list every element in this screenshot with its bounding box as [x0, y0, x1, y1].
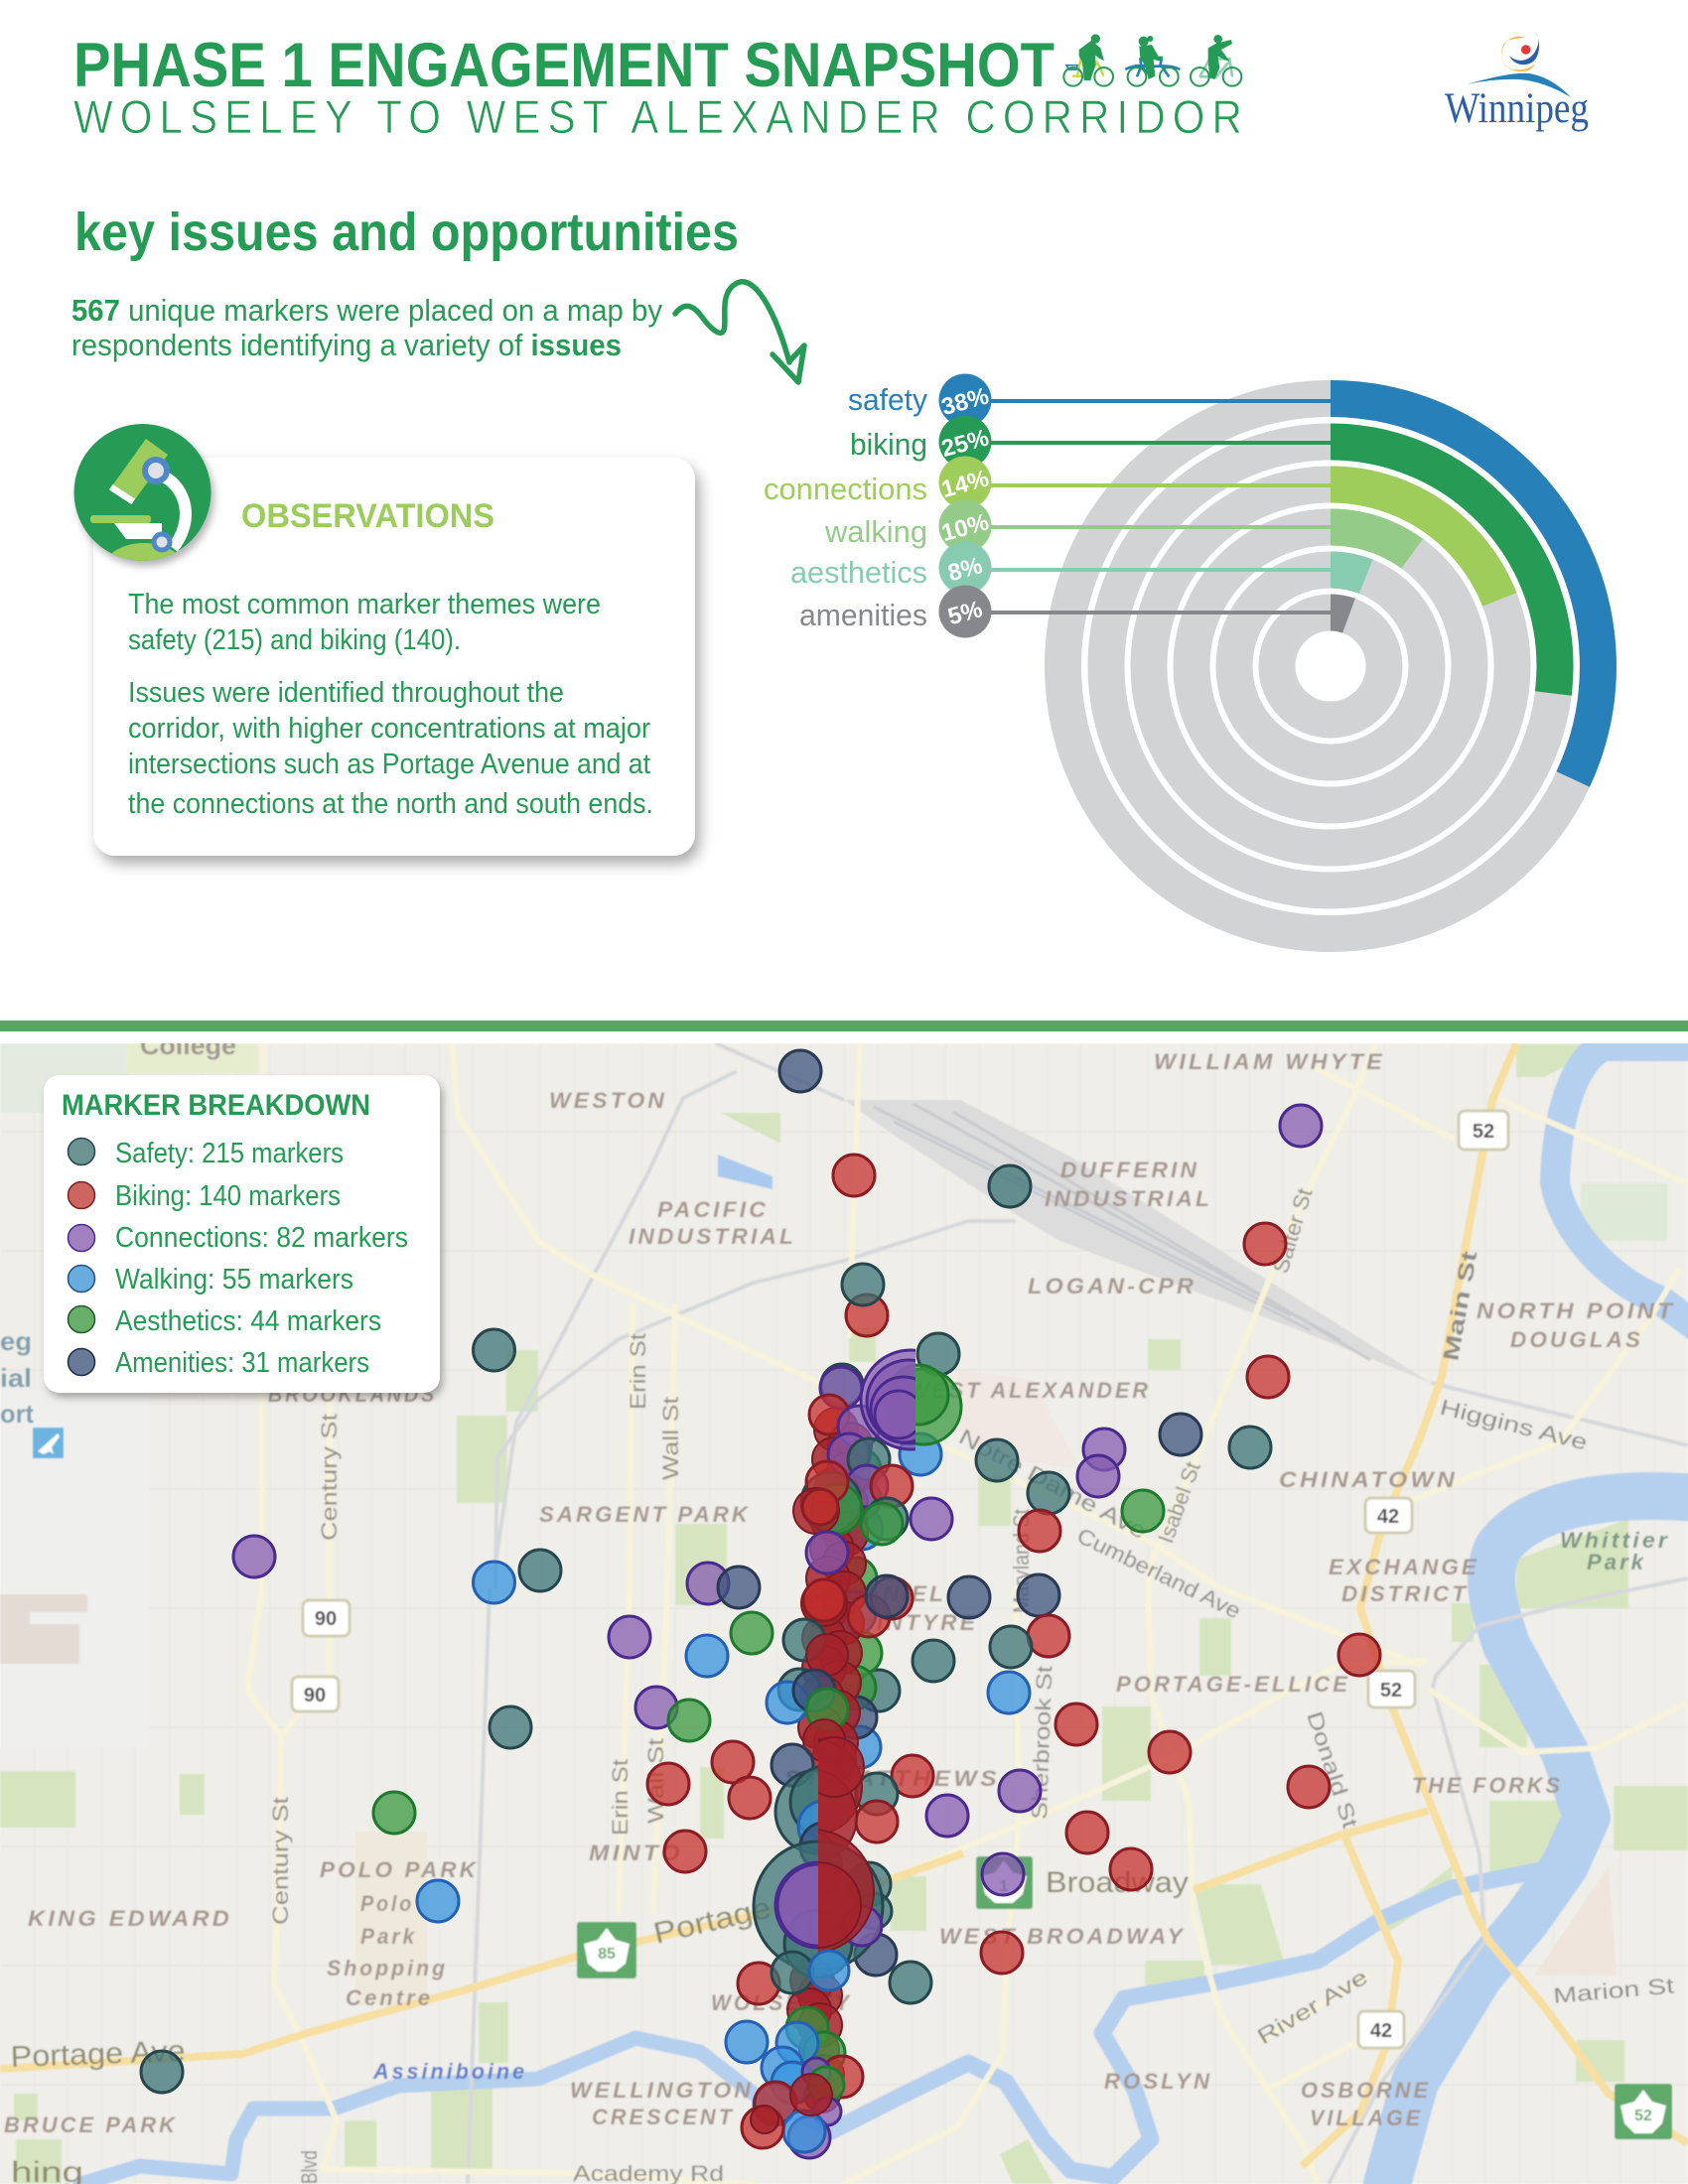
neighbourhood and street labels: WEST BROADWAY	[939, 1924, 1186, 1949]
neighbourhood and street labels: Century St	[317, 1414, 342, 1541]
card body text: Issues were identified throughout the	[128, 677, 564, 709]
legend item: biking: Biking: 140 markers	[115, 1180, 341, 1212]
neighbourhood and street labels: ROSLYN	[1104, 2069, 1212, 2094]
neighbourhood and street labels: Sherbrook St	[1027, 1665, 1056, 1820]
markers: individual locations	[141, 1050, 1380, 2093]
card body text: The most common marker themes were	[128, 589, 601, 620]
neighbourhood and street labels: Notre Dame Ave	[955, 1424, 1151, 1544]
label: aesthetics	[790, 542, 991, 594]
legend item: safety: Safety: 215 markers	[115, 1138, 344, 1169]
neighbourhood and street labels: DANIEL	[844, 1581, 946, 1606]
neighbourhood and street labels: OSBORNE	[1301, 2078, 1431, 2103]
neighbourhood and street labels: Erin St	[608, 1759, 633, 1836]
intro text: respondents identifying a variety of issues	[71, 328, 622, 362]
neighbourhood and street labels: Centre	[346, 1985, 433, 2010]
neighbourhood and street labels: Maryland St	[1009, 1509, 1034, 1613]
label: connections: connections	[764, 472, 927, 506]
arc: biking	[1331, 442, 1555, 693]
label: connections	[764, 457, 992, 508]
neighbourhood and street labels: Blvd	[297, 2150, 322, 2184]
neighbourhood and street labels: Higgins Ave	[1438, 1395, 1590, 1455]
neighbourhood and street labels: Polo	[360, 1891, 414, 1916]
neighbourhood and street labels: EXCHANGE	[1329, 1555, 1479, 1579]
neighbourhood and street labels: Marion St	[1552, 1973, 1675, 2008]
title: PHASE 1 ENGAGEMENT SNAPSHOT	[73, 31, 1055, 100]
neighbourhood and street labels: Park	[360, 1924, 417, 1949]
legend item: connections: Connections: 82 markers	[115, 1222, 408, 1254]
arrow: squiggle to chart	[675, 282, 804, 382]
neighbourhood and street labels: NORTH POINT	[1477, 1298, 1675, 1323]
neighbourhood and street labels: Whittier	[1560, 1528, 1670, 1553]
map: corridor base map with markers	[0, 1030, 1688, 2184]
neighbourhood and street labels: ort	[0, 1399, 34, 1429]
icon: microscope	[72, 424, 218, 570]
arc: safety	[1331, 399, 1598, 779]
neighbourhood and street labels: eg	[0, 1326, 32, 1356]
rail yard	[844, 1100, 1431, 1383]
neighbourhood and street labels: Broadway	[1046, 1866, 1189, 1899]
route leaf shields: 1	[1000, 1878, 1009, 1895]
highway shields: 42	[1370, 2020, 1392, 2042]
label: connections: 14%	[938, 465, 992, 503]
neighbourhood and street labels: Portage Ave	[10, 2035, 186, 2074]
neighbourhood and street labels: Assiniboine	[372, 2059, 527, 2084]
neighbourhood and street labels: ial	[0, 1363, 32, 1393]
label: walking: walking	[824, 514, 927, 549]
neighbourhood and street labels: Isabel St	[1153, 1458, 1205, 1547]
main Portage cluster	[751, 1830, 892, 1993]
neighbourhood and street labels: DUFFERIN	[1060, 1158, 1199, 1182]
neighbourhood and street labels: Wall St	[658, 1397, 683, 1480]
roads	[247, 1043, 1688, 2184]
neighbourhood and street labels: Shopping	[327, 1956, 448, 1980]
neighbourhood and street labels: WESTON	[549, 1088, 667, 1113]
neighbourhood and street labels: Salter St	[1268, 1185, 1318, 1276]
neighbourhood and street labels: Main St	[1438, 1248, 1482, 1363]
neighbourhood and street labels: BROOKLANDS	[268, 1382, 437, 1407]
label: biking: 25%	[938, 424, 992, 463]
subtitle: WOLSELEY TO WEST ALEXANDER CORRIDOR	[73, 90, 1249, 143]
markers: corridor cluster	[742, 1333, 961, 2158]
chart tracks	[1062, 399, 1599, 933]
arc: aesthetics	[1331, 570, 1366, 577]
label: amenities: 5%	[945, 596, 985, 630]
neighbourhood and street labels: ST MATTHEWS	[784, 1766, 1000, 1791]
legend item: walking: Walking: 55 markers	[115, 1264, 353, 1296]
north cluster	[783, 1333, 961, 1676]
label: aesthetics: aesthetics	[790, 555, 927, 590]
label: walking	[824, 500, 992, 552]
mid cluster	[765, 1668, 900, 1862]
neighbourhood and street labels: WILLIAM WHYTE	[1154, 1049, 1385, 1074]
neighbourhood and street labels: INDUSTRIAL	[1045, 1186, 1212, 1211]
card body text: safety (215) and biking (140).	[128, 624, 461, 656]
map base layer	[0, 1030, 1688, 2184]
route leaf shields	[577, 1856, 1672, 2139]
card body text: the connections at the north and south ends.	[128, 788, 653, 820]
arc: amenities	[1331, 613, 1348, 615]
legend item: amenities: Amenities: 31 markers	[115, 1347, 369, 1379]
card heading: OBSERVATIONS	[241, 497, 494, 535]
icon: cyclist two	[1125, 36, 1180, 86]
label: safety: 38%	[938, 382, 992, 421]
highway shields: 42	[1377, 1506, 1399, 1528]
neighbourhood and street labels: POLO PARK	[320, 1857, 479, 1882]
label: safety: safety	[848, 382, 927, 417]
label: amenities: amenities	[799, 598, 927, 632]
card body text: corridor, with higher concentrations at major	[128, 713, 650, 745]
neighbourhood and street labels: WEST ALEXANDER	[909, 1378, 1151, 1403]
heading: key issues and opportunities: key issues and opportunities	[74, 203, 739, 262]
logo: Winnipeg	[1445, 32, 1589, 132]
route leaf shields: 52	[1634, 2108, 1652, 2124]
card body text: intersections such as Portage Avenue and at	[128, 749, 650, 780]
logo mark	[1467, 32, 1571, 97]
intro text: 567 unique markers were placed on a map by	[71, 293, 662, 328]
neighbourhood and street labels: MINTO	[589, 1841, 683, 1865]
route leaf shields: 85	[598, 1946, 616, 1963]
neighbourhood and street labels: Portage	[650, 1892, 774, 1951]
panel: observations card	[73, 424, 695, 856]
label: walking: 10%	[938, 508, 992, 547]
icon: airport	[33, 1428, 64, 1458]
neighbourhood and street labels: SARGENT PARK	[539, 1502, 751, 1527]
neighbourhood and street labels: River Ave	[1253, 1964, 1372, 2049]
neighbourhood and street labels: CHINATOWN	[1279, 1467, 1458, 1492]
neighbourhood and street labels: INDUSTRIAL	[629, 1224, 796, 1249]
south cluster	[742, 2007, 863, 2158]
logo wordmark: Winnipeg	[1445, 85, 1589, 132]
legend background	[44, 1075, 440, 1393]
neighbourhood and street labels: CRESCENT	[592, 2105, 735, 2129]
label: amenities	[799, 586, 991, 637]
icon: three cyclists	[1063, 34, 1241, 86]
neighbourhood and street labels: Donald St	[1302, 1708, 1363, 1832]
neighbourhood and street labels: Cumberland Ave	[1073, 1523, 1245, 1623]
panel: marker breakdown legend	[44, 1075, 440, 1393]
central column	[787, 1408, 883, 2113]
highway shields: 52	[1473, 1121, 1494, 1143]
neighbourhood and street labels: KING EDWARD	[28, 1906, 232, 1931]
neighbourhood and street labels: Erin St	[626, 1333, 650, 1410]
leader lines	[965, 401, 1331, 613]
neighbourhood and street labels: Park	[1587, 1550, 1646, 1574]
legend item: aesthetics: Aesthetics: 44 markers	[115, 1305, 381, 1337]
neighbourhood and street labels: Century St	[268, 1797, 293, 1925]
label: biking	[850, 415, 992, 469]
highway shields	[292, 1111, 1508, 2048]
card background	[93, 458, 695, 856]
neighbourhood and street labels: WELLINGTON	[570, 2078, 754, 2103]
label: aesthetics: 8%	[945, 552, 985, 587]
rivers	[1555, 1046, 1688, 1335]
arc: connections	[1331, 484, 1499, 600]
neighbourhood and street labels: PORTAGE-ELLICE	[1116, 1672, 1350, 1697]
icon: cyclist three	[1191, 35, 1241, 86]
highway shields: 90	[304, 1685, 326, 1706]
neighbourhood and street labels: DISTRICT	[1341, 1581, 1469, 1606]
neighbourhood and street labels: Wall St	[643, 1738, 668, 1824]
neighbourhood and street labels: PACIFIC	[657, 1197, 769, 1222]
neighbourhood and street labels: LOGAN-CPR	[1028, 1274, 1196, 1298]
neighbourhood and street labels: McINTYRE	[839, 1610, 978, 1635]
neighbourhood and street labels: VILLAGE	[1310, 2106, 1423, 2130]
section divider band	[0, 1021, 1688, 1031]
chart: radial bar chart of issue themes	[764, 373, 1599, 933]
neighbourhood and street labels: DOUGLAS	[1510, 1327, 1643, 1352]
rail lines	[468, 1043, 1688, 2184]
neighbourhood and street labels	[0, 1030, 1675, 2184]
card body text	[128, 589, 653, 820]
neighbourhood and street labels: WOLSELEY	[711, 1990, 852, 2015]
highway shields: 52	[1380, 1680, 1402, 1702]
neighbourhood and street labels: THE FORKS	[1412, 1773, 1563, 1798]
neighbourhood and street labels: BRUCE PARK	[4, 2113, 178, 2137]
intro text	[71, 293, 662, 362]
neighbourhood and street labels: College	[140, 1030, 236, 1060]
label: safety	[848, 373, 992, 427]
highway shields: 90	[315, 1608, 337, 1630]
legend heading: MARKER BREAKDOWN	[62, 1089, 370, 1122]
arc: walking	[1331, 527, 1412, 554]
icon: cyclist with basket	[1063, 34, 1113, 86]
label: biking: biking	[850, 427, 927, 462]
